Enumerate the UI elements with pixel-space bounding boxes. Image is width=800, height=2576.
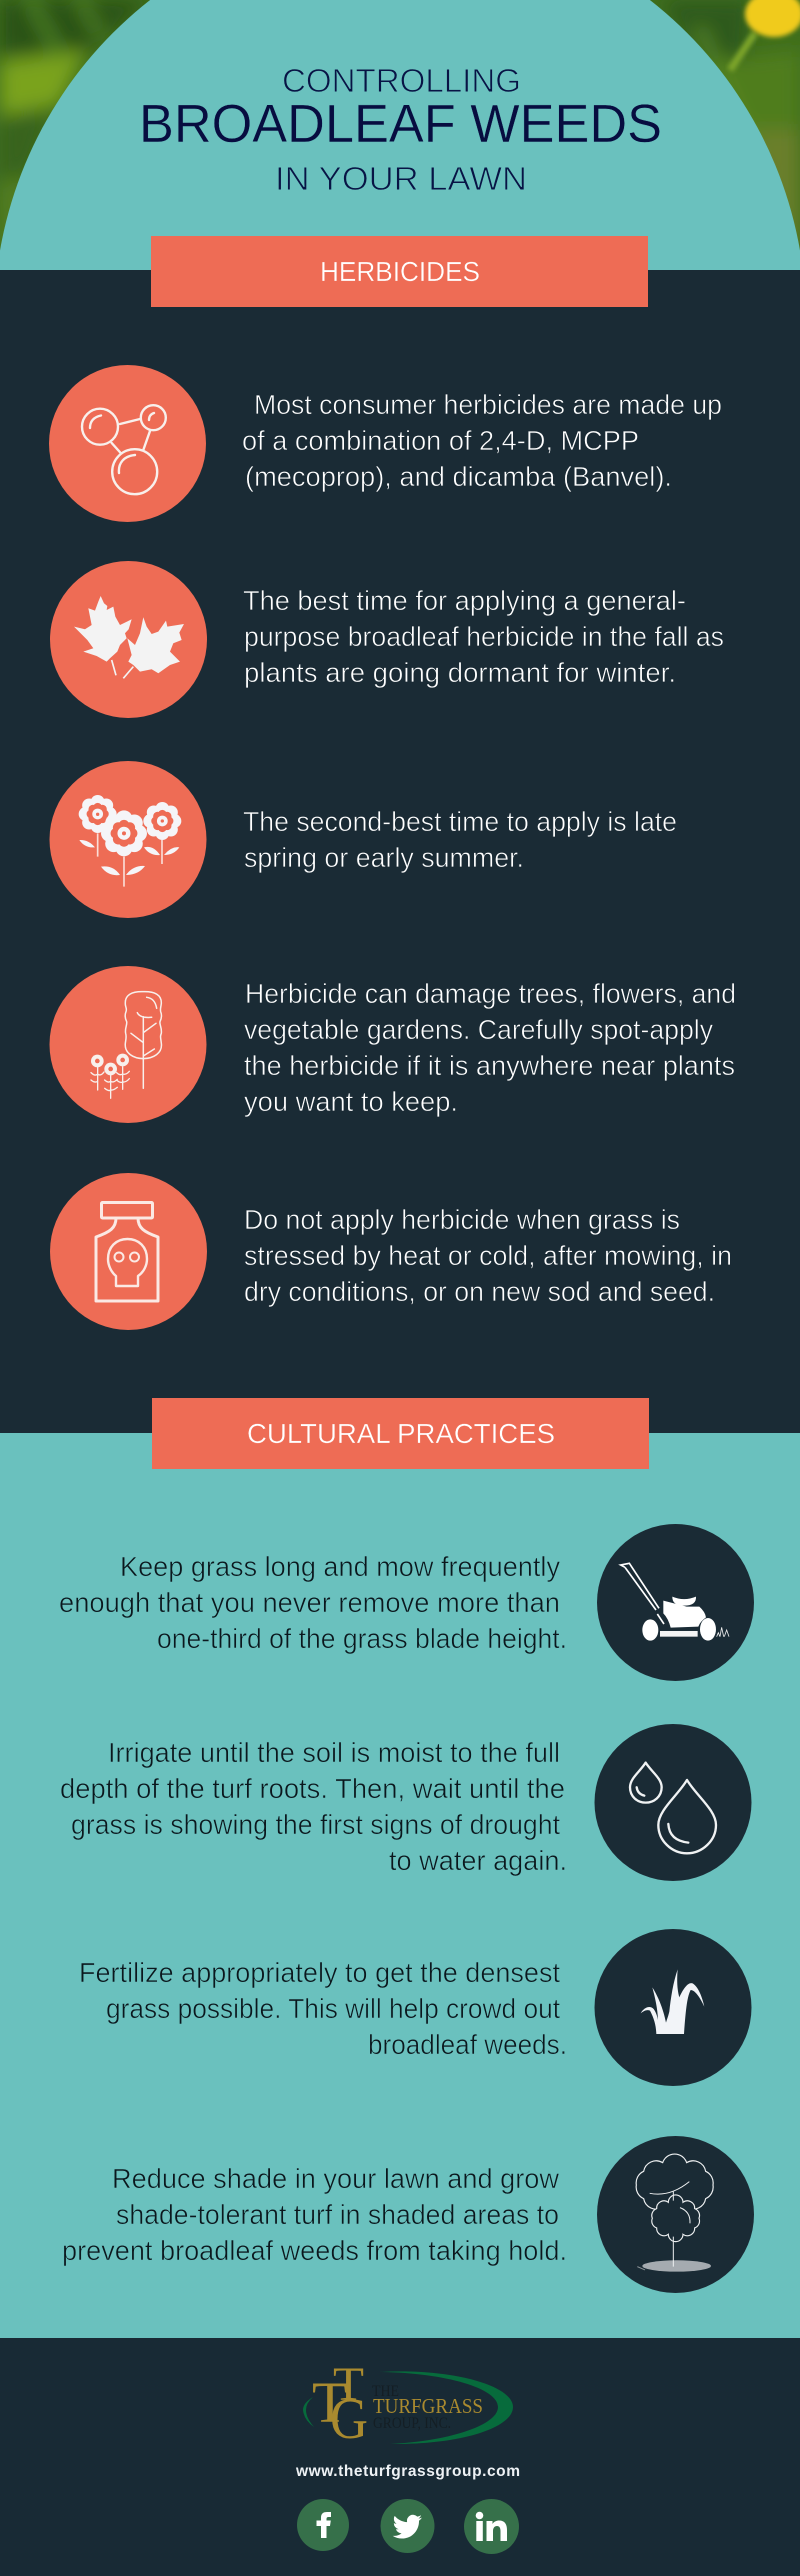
text: herbicide ingredients: Most consumer herbicides are made up [254,389,722,420]
text: mowing: one-third of the grass blade height. [157,1623,567,1654]
icon: water drops [594,1724,752,1881]
text: irrigation: depth of the turf roots. Then, wait until the [60,1773,565,1804]
icon: twitter [380,2499,434,2553]
heading bar: cultural practices: CULTURAL PRACTICES [247,1418,555,1449]
text: herbicide damage: vegetable gardens. Carefully spot-apply [244,1014,713,1045]
icon: flowers [50,761,206,918]
text: second-best time: The second-best time to apply is late [243,806,677,837]
text: mowing [59,1551,567,1654]
dark herbicides panel [0,270,800,1433]
grass photo background [0,0,800,270]
logo: The Turfgrass Group: THE [372,2383,399,2400]
teal arch header [0,0,800,726]
text: when not to apply: Do not apply herbicide when grass is [244,1204,680,1235]
icon: maple leaves [50,561,207,718]
icon: linkedin [464,2499,519,2554]
text: herbicide damage: Herbicide can damage trees, flowers, and [245,978,736,1009]
text: herbicide ingredients [242,389,722,492]
teal cultural practices panel [0,1433,800,2338]
website url: www.theturfgrassgroup.com [295,2463,520,2480]
text: irrigation: to water again. [389,1845,567,1876]
heading bar: cultural practices [152,1398,649,1469]
text: herbicide damage: you want to keep. [244,1086,458,1117]
text: irrigation: grass is showing the first signs of drought [71,1809,560,1840]
text: shade: shade-tolerant turf in shaded areas to [116,2199,559,2230]
text: mowing: Keep grass long and mow frequently [120,1551,560,1582]
heading bar: herbicides: HERBICIDES [320,256,480,287]
text: herbicide ingredients: of a combination of 2,4-D, MCPP [242,425,639,456]
text: shade [62,2163,567,2266]
icon: grass [594,1929,752,2086]
text: herbicide ingredients: (mecoprop), and dicamba (Banvel). [245,461,672,492]
logo: The Turfgrass Group: G [330,2386,368,2451]
text: fertilizing: broadleaf weeds. [368,2029,567,2060]
title: IN YOUR LAWN [275,160,527,197]
text: best application time: plants are going dormant for winter. [244,657,676,688]
icon: facebook [297,2499,349,2551]
text: herbicide damage [244,978,736,1117]
text: second-best time [243,806,677,873]
text: fertilizing [79,1957,567,2060]
text: second-best time: spring or early summer. [244,842,524,873]
text: mowing: enough that you never remove more than [59,1587,560,1618]
text: fertilizing: grass possible. This will help crowd out [106,1993,560,2024]
text: irrigation [60,1737,567,1876]
text: shade: prevent broadleaf weeds from taking hold. [62,2235,567,2266]
text: when not to apply [244,1204,732,1307]
logo: The Turfgrass Group: GROUP, INC. [373,2415,451,2432]
logo: The Turfgrass Group: T [333,2358,364,2411]
logo: The Turfgrass Group: T [312,2370,348,2435]
title: CONTROLLING [282,62,521,99]
logo: The Turfgrass Group [303,2358,513,2451]
text: when not to apply: dry conditions, or on new sod and seed. [244,1276,715,1307]
icon: poison bottle [50,1173,207,1330]
title [139,62,662,197]
text: best application time: purpose broadleaf herbicide in the fall as [244,621,724,652]
text: when not to apply: stressed by heat or cold, after mowing, in [244,1240,732,1271]
text: irrigation: Irrigate until the soil is moist to the full [108,1737,560,1768]
text: shade: Reduce shade in your lawn and grow [112,2163,560,2194]
icon: shade tree [597,2136,754,2293]
footer panel [0,2338,800,2576]
text: best application time [243,585,724,688]
icon: lawn mower [597,1524,754,1681]
heading bar: herbicides [151,236,648,307]
icon: molecule [49,365,206,522]
text: fertilizing: Fertilize appropriately to get the densest [79,1957,560,1988]
text: best application time: The best time for applying a general- [243,585,686,616]
text: herbicide damage: the herbicide if it is anywhere near plants [244,1050,735,1081]
logo: The Turfgrass Group: TURFGRASS [373,2394,483,2418]
title: BROADLEAF WEEDS [139,94,662,154]
icon: tree and flowers [50,966,206,1123]
